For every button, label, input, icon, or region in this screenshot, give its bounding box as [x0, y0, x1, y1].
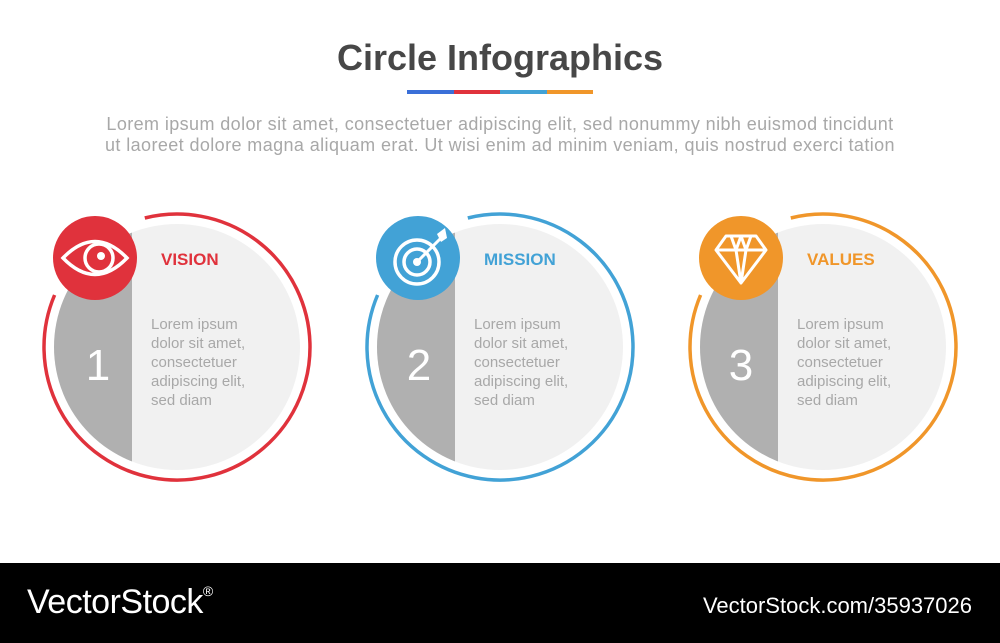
- number 3: 3: [729, 341, 753, 390]
- icon: diamond: [699, 216, 783, 300]
- heading: values: VALUES: [807, 250, 875, 269]
- icon: target: [376, 216, 460, 300]
- text block: Lorem ipsum: [151, 316, 238, 333]
- text block: dolor sit amet,: [797, 335, 891, 352]
- text block: consectetuer: [474, 354, 560, 371]
- footer url: VectorStock.com/35937026: [703, 593, 972, 618]
- title: Circle Infographics: [337, 37, 663, 78]
- text block: adipiscing elit,: [474, 373, 568, 390]
- text block: adipiscing elit,: [151, 373, 245, 390]
- subtitle: [105, 114, 895, 155]
- text block: sed diam: [151, 392, 212, 409]
- subtitle: ut laoreet dolore magna aliquam erat. Ut wisi enim ad minim veniam, quis nostrud exerci tation: [105, 135, 895, 155]
- text block: consectetuer: [151, 354, 237, 371]
- text block: consectetuer: [797, 354, 883, 371]
- icon: eye: [53, 216, 137, 300]
- circles chart: [42, 212, 958, 482]
- panel: mission: [367, 214, 633, 480]
- text block: sed diam: [797, 392, 858, 409]
- panel: vision: [44, 214, 310, 480]
- title underline: [407, 90, 593, 94]
- panel: values: [690, 214, 956, 480]
- subtitle: Lorem ipsum dolor sit amet, consectetuer adipiscing elit, sed nonummy nibh euismod tincidunt: [106, 114, 894, 134]
- text block: Lorem ipsum: [797, 316, 884, 333]
- footer logo: VectorStock®: [27, 583, 213, 621]
- number 1: 1: [86, 341, 110, 390]
- number 2: 2: [407, 341, 431, 390]
- text block: Lorem ipsum: [474, 316, 561, 333]
- heading: vision: VISION: [161, 250, 219, 269]
- text block: sed diam: [474, 392, 535, 409]
- text block: dolor sit amet,: [474, 335, 568, 352]
- text block: adipiscing elit,: [797, 373, 891, 390]
- footer bar: [0, 563, 1000, 643]
- text block: dolor sit amet,: [151, 335, 245, 352]
- heading: mission: MISSION: [484, 250, 556, 269]
